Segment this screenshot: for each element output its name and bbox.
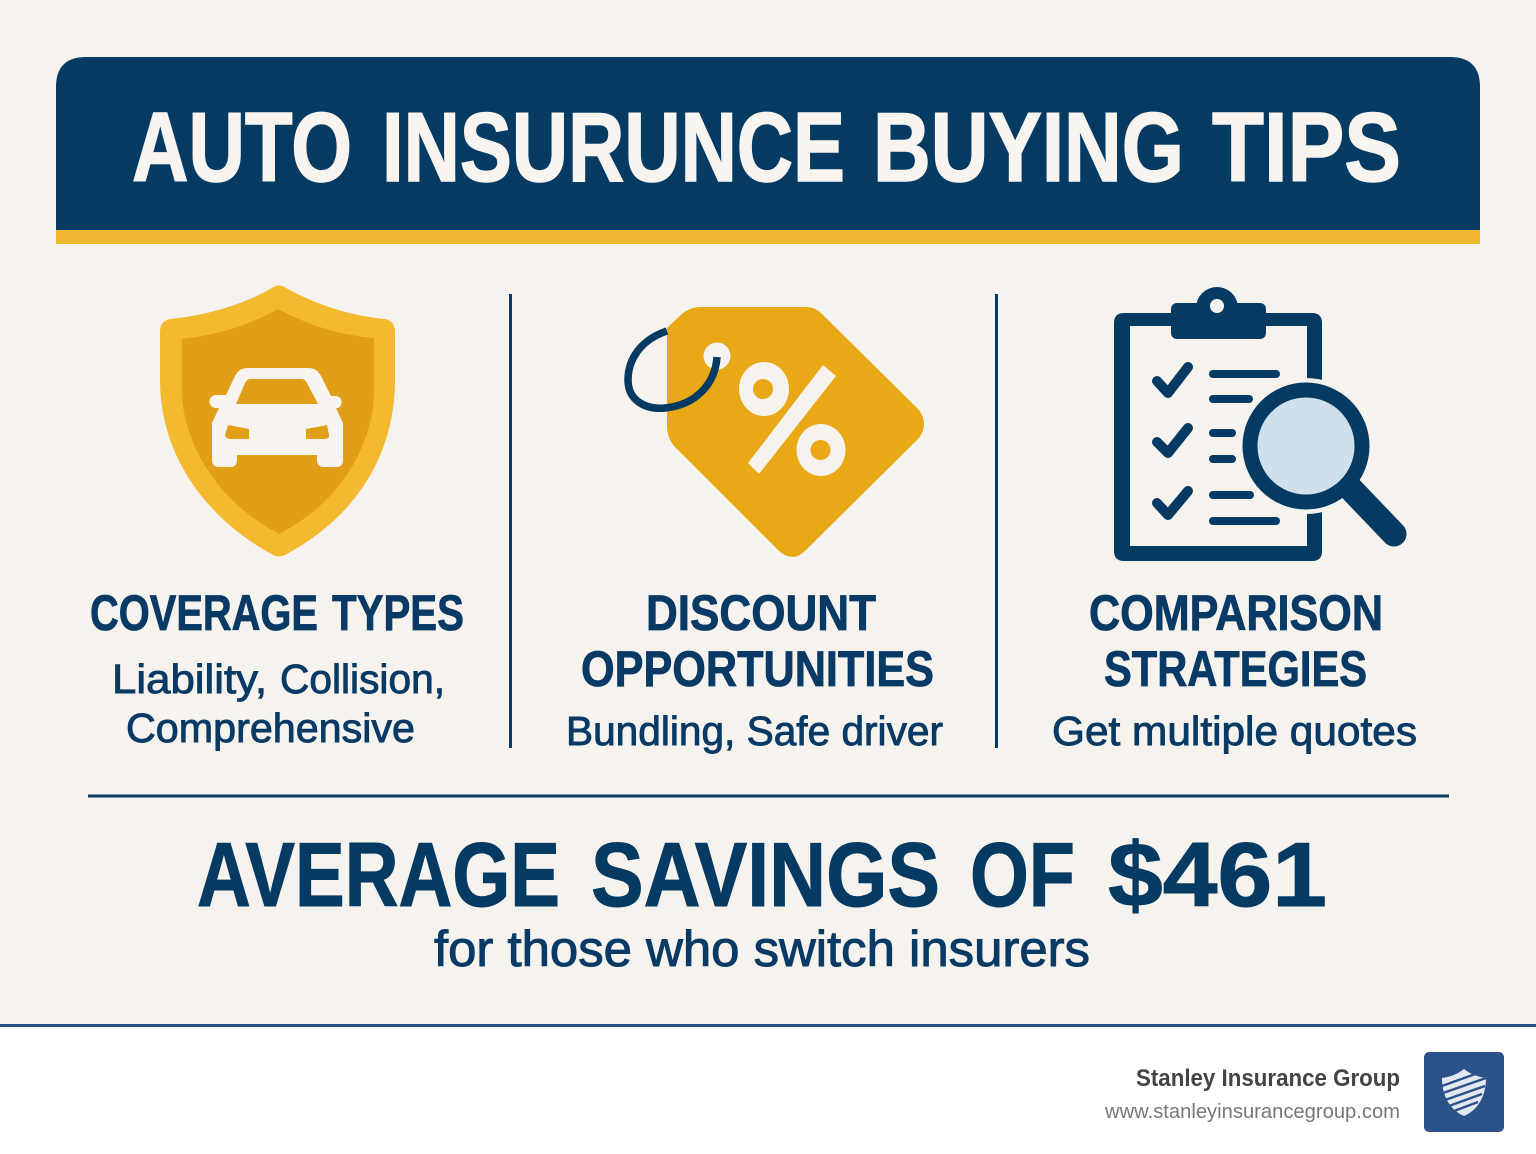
title: BUYING [873, 92, 1184, 202]
heading: discount opportunities: DISCOUNT [646, 585, 876, 641]
header banner [56, 57, 1480, 244]
text: coverage list: Comprehensive [126, 705, 415, 751]
text: coverage list [112, 656, 445, 751]
company name: Stanley Insurance Group [1136, 1065, 1400, 1092]
savings callout [197, 825, 1327, 977]
savings headline: $461 [1108, 825, 1327, 926]
heading: comparison strategies [1089, 585, 1383, 697]
title: TIPS [1212, 92, 1401, 202]
icon: clipboard with magnifier [1114, 287, 1394, 561]
savings subtext: for those who switch insurers [434, 921, 1090, 977]
heading: discount opportunities: OPPORTUNITIES [581, 641, 934, 697]
text: coverage list: Collision, [280, 656, 445, 702]
text: discount list: Bundling, Safe driver [566, 708, 943, 754]
savings headline: SAVINGS [591, 825, 940, 926]
icon: company logo [1424, 1052, 1504, 1132]
heading: coverage types: TYPES [332, 585, 464, 641]
panel: coverage types [90, 286, 464, 751]
title: INSURUNCE [382, 92, 845, 202]
company url: www.stanleyinsurancegroup.com [1104, 1101, 1400, 1123]
panel: discount opportunities [566, 307, 943, 754]
icon: discount tag [628, 307, 924, 557]
panel: comparison strategies [1052, 287, 1417, 754]
savings headline [197, 825, 1327, 926]
text: coverage list: Liability, [112, 656, 267, 702]
heading: comparison strategies: STRATEGIES [1104, 641, 1367, 697]
heading: discount opportunities [581, 585, 934, 697]
savings headline: OF [970, 825, 1075, 926]
heading: coverage types: COVERAGE [90, 585, 318, 641]
footer [0, 1024, 1536, 1154]
title [132, 92, 1401, 202]
heading: comparison strategies: COMPARISON [1089, 585, 1383, 641]
savings headline: AVERAGE [197, 825, 560, 926]
text: comparison tip: Get multiple quotes [1052, 708, 1417, 754]
icon: shield with car [160, 286, 395, 556]
title: AUTO [132, 92, 352, 202]
